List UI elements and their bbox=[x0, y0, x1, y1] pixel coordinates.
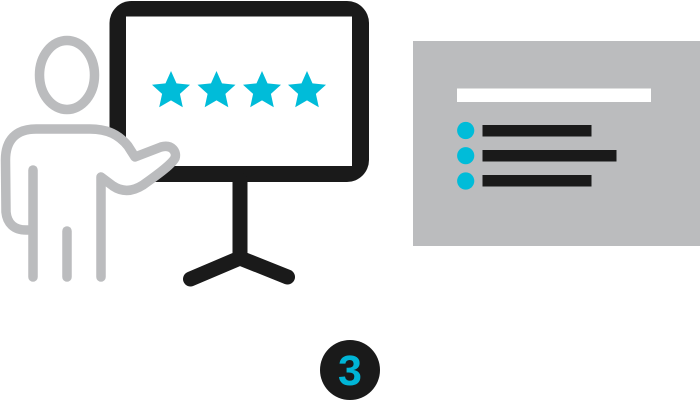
step number badge: 3 bbox=[338, 347, 362, 395]
presenter body and pointing arm bbox=[6, 129, 175, 277]
list item 2 bbox=[457, 147, 616, 164]
card background bbox=[413, 41, 700, 246]
presenter outline bbox=[6, 129, 175, 277]
list item 3 bbox=[457, 172, 592, 190]
presenter left leg line bbox=[28, 170, 38, 277]
rating stars bbox=[152, 71, 326, 107]
list item 1 bbox=[457, 122, 592, 139]
icon: presentation board bbox=[110, 1, 369, 279]
card heading bar bbox=[457, 88, 651, 102]
board stand bbox=[190, 180, 288, 279]
presenter centre leg line bbox=[62, 231, 72, 277]
presenter head bbox=[40, 40, 94, 110]
panel: list card bbox=[413, 41, 700, 246]
board frame bbox=[110, 1, 369, 182]
board screen bbox=[126, 16, 352, 166]
step number badge bbox=[320, 340, 380, 400]
icon: presenter figure bbox=[6, 40, 175, 277]
